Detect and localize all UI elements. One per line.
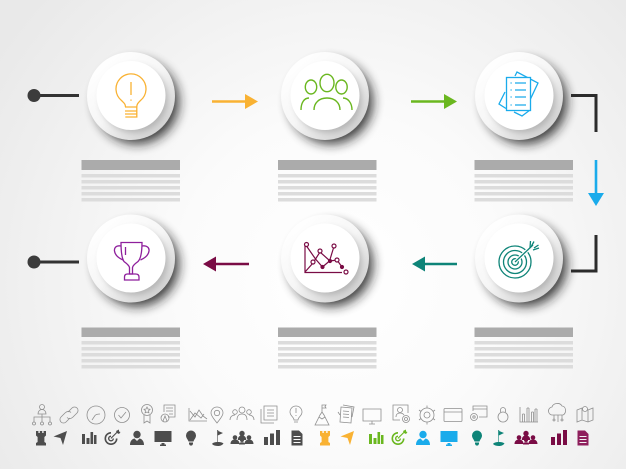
step 2: team circle [281, 52, 373, 144]
icon: group [230, 407, 254, 420]
icon: people [301, 74, 352, 110]
icon row: solid coloured icons [320, 430, 588, 446]
icon: monitor [363, 409, 381, 424]
icon: gauge [87, 406, 105, 424]
icon: documents [499, 72, 538, 116]
icon: window [444, 408, 462, 422]
text block 3 [474, 160, 573, 202]
step 1: idea circle [87, 52, 179, 144]
text block 1 [82, 160, 180, 202]
arrow: blue down [588, 160, 604, 206]
end connector bottom [28, 256, 79, 268]
start connector top [28, 89, 79, 102]
icon: hierarchy [32, 404, 52, 425]
icon: profile seal [393, 405, 410, 422]
icon: gear [419, 406, 435, 424]
step 3: documents circle [475, 52, 567, 144]
connector: top right bracket [571, 96, 596, 132]
icon: outline bars [520, 407, 538, 422]
icon: link [60, 407, 78, 423]
icon: settings window [470, 406, 487, 420]
icon: lock [498, 408, 508, 422]
text block 2 [278, 160, 376, 202]
text block 5 [278, 328, 376, 368]
text block 6 [82, 328, 180, 368]
icon: check [114, 408, 130, 422]
text block 4 [474, 328, 573, 368]
icon: bulb [290, 406, 302, 422]
step 6: trophy circle [87, 214, 179, 306]
icon: mountain flag [315, 405, 329, 425]
step 4: target circle [475, 214, 567, 306]
arrow: green [411, 94, 457, 109]
icon: notes [338, 405, 354, 423]
icon: award [142, 404, 152, 423]
arrow: teal left [412, 256, 457, 272]
icon: location [211, 407, 223, 423]
icon: lightbulb [116, 74, 146, 117]
arrow: maroon left [203, 256, 249, 272]
step 5: chart circle [281, 214, 373, 306]
icon: list pages [261, 406, 277, 423]
icon: report [161, 405, 175, 422]
icon: map [577, 406, 593, 422]
icon: trophy [114, 242, 149, 280]
icon row: outline icons [32, 403, 593, 425]
icon: cloud [548, 403, 566, 422]
icon: chart [189, 408, 207, 421]
icon: target [499, 241, 539, 278]
connector: lower right bracket [571, 235, 596, 271]
icon row: solid grey icons [36, 430, 302, 446]
arrow: yellow [212, 94, 258, 109]
icon: line chart [304, 242, 348, 274]
